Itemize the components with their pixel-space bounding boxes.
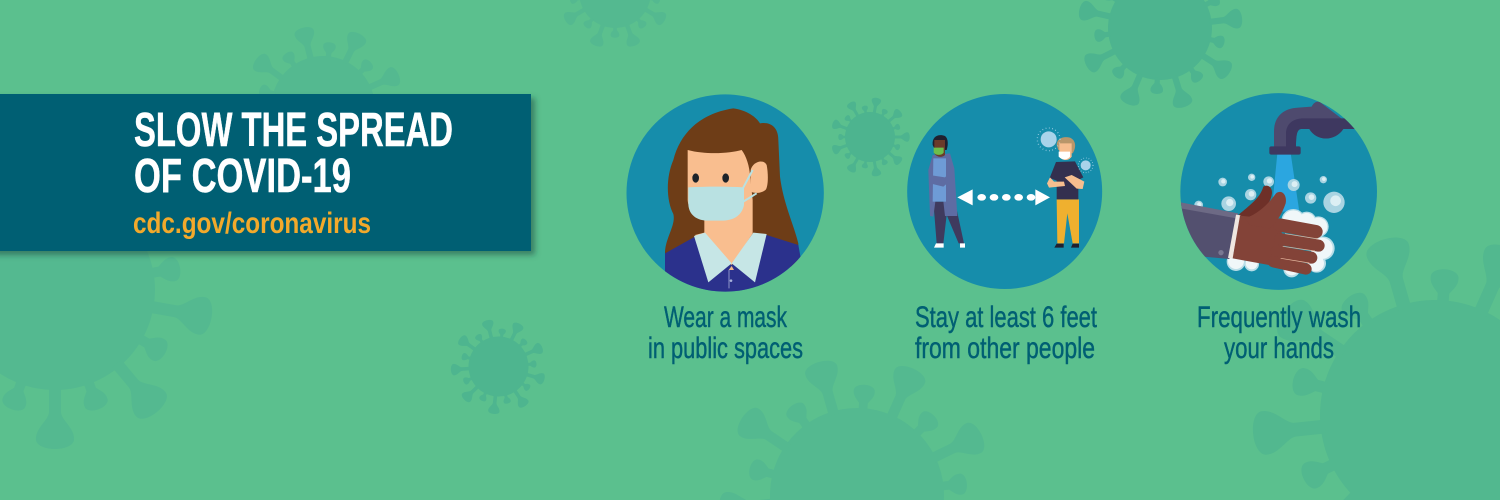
ear xyxy=(751,161,768,193)
water stream xyxy=(1272,153,1299,212)
caption: distance xyxy=(915,301,1097,365)
bubbles xyxy=(1194,174,1345,213)
caption: wash hands: Frequently wash xyxy=(1197,301,1361,334)
face mask xyxy=(1059,152,1070,159)
title: SLOW THE SPREAD xyxy=(134,104,453,157)
sleeve xyxy=(1181,204,1236,259)
caption: distance: from other people xyxy=(915,332,1095,365)
circle background xyxy=(907,94,1102,289)
virus: bottom centre xyxy=(675,312,1040,500)
shoes xyxy=(1054,244,1079,248)
virus: top centre xyxy=(557,0,673,48)
face mask xyxy=(934,148,944,155)
placket and buttons xyxy=(728,270,730,288)
t-shirt xyxy=(1050,161,1083,199)
caption: mask: in public spaces xyxy=(648,332,803,365)
arms xyxy=(1047,175,1084,189)
virus: large left xyxy=(0,105,239,475)
arms xyxy=(929,170,954,187)
banner panel xyxy=(0,94,531,251)
shoes xyxy=(934,243,965,248)
circle background xyxy=(1180,93,1377,290)
faucet flange xyxy=(1269,146,1301,155)
face xyxy=(934,140,945,157)
collar xyxy=(694,233,732,282)
circle background xyxy=(626,94,824,292)
thumb xyxy=(1250,192,1286,220)
finger lines xyxy=(1281,234,1318,263)
caption: mask xyxy=(648,301,803,365)
arrow xyxy=(957,189,1050,205)
virus particles xyxy=(1037,128,1093,173)
caption: distance: Stay at least 6 feet xyxy=(915,301,1097,334)
fingers xyxy=(1273,225,1319,269)
face and neck xyxy=(688,150,753,265)
hair xyxy=(1057,137,1075,153)
hair xyxy=(933,135,948,150)
palm xyxy=(1232,216,1284,265)
banner background xyxy=(0,94,531,251)
hair xyxy=(665,108,798,267)
shirt xyxy=(933,158,946,202)
faucet xyxy=(1274,102,1355,148)
title: OF COVID-19 xyxy=(134,150,351,203)
shirt xyxy=(665,235,802,297)
cuff xyxy=(1230,215,1238,258)
right person xyxy=(1047,137,1084,248)
eyes xyxy=(692,173,729,183)
caption: wash hands xyxy=(1197,301,1361,365)
virus: large right xyxy=(1208,189,1500,500)
rear thumb xyxy=(1238,186,1272,220)
coat xyxy=(928,153,957,217)
soap foam xyxy=(1227,209,1335,277)
ear straps xyxy=(743,170,757,202)
sleeve button xyxy=(1218,250,1224,255)
icon: washing hands under a faucet xyxy=(1177,93,1377,290)
virus: small lower xyxy=(435,303,563,430)
virus: small centre xyxy=(824,91,916,182)
left person xyxy=(928,135,965,248)
trousers xyxy=(1057,199,1079,243)
icon: two people six feet apart xyxy=(907,94,1102,289)
url: cdc.gov/coronavirus xyxy=(133,207,371,240)
virus: top left xyxy=(213,0,434,217)
mask xyxy=(688,187,744,221)
legs xyxy=(933,202,964,243)
caption: wash hands: your hands xyxy=(1224,332,1334,365)
icon: woman wearing a mask xyxy=(626,94,824,297)
figure xyxy=(665,108,802,297)
caption: mask: Wear a mask xyxy=(664,301,788,334)
virus: top right xyxy=(1073,0,1247,113)
face xyxy=(1059,143,1072,160)
title xyxy=(134,104,453,203)
